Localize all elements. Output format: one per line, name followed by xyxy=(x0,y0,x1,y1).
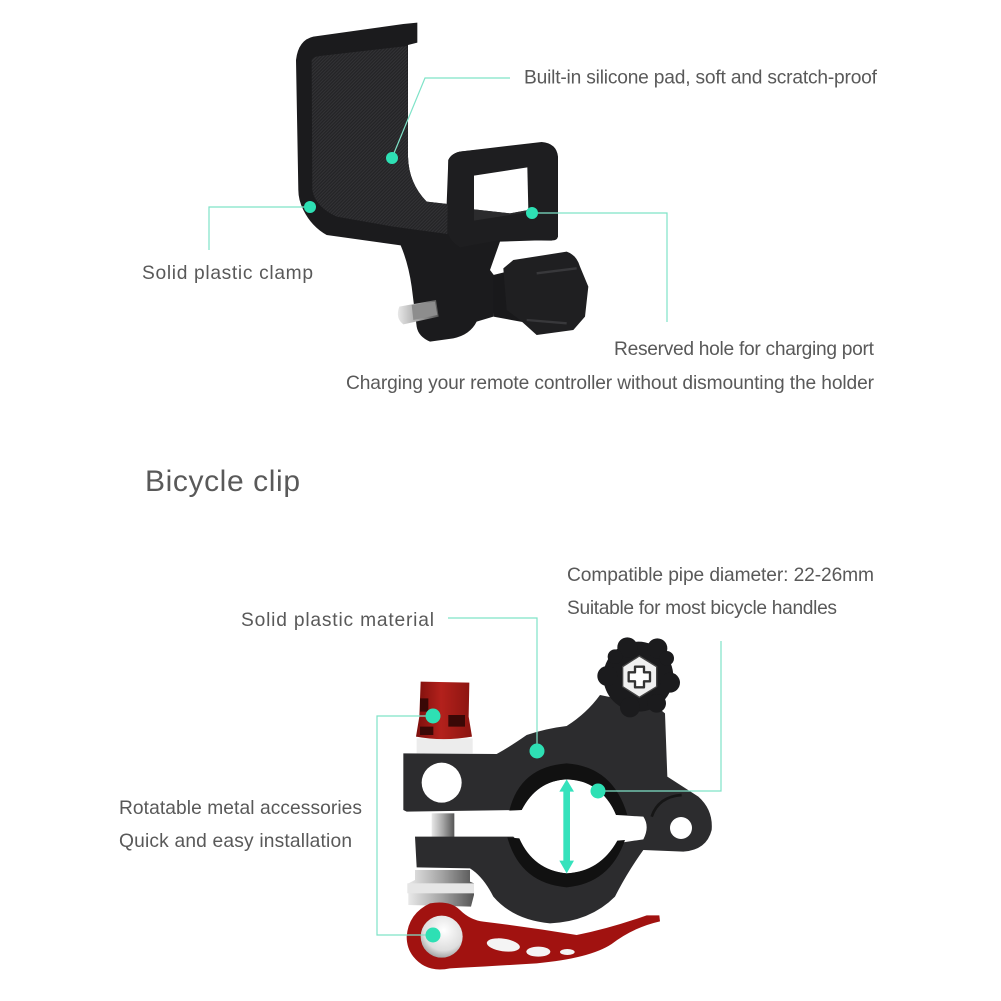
product photo: remote controller holder xyxy=(296,23,588,342)
metal washer xyxy=(408,870,474,907)
hinge hole xyxy=(670,817,692,839)
top knob xyxy=(597,637,680,717)
callout: rotatable metal accessories: Rotatable metal accessories xyxy=(119,798,362,819)
diameter arrow xyxy=(559,779,574,873)
callout: silicone pad xyxy=(386,68,878,164)
callout: solid plastic clamp: Solid plastic clamp xyxy=(142,263,313,284)
red lever xyxy=(407,902,660,969)
metal screw xyxy=(398,300,439,324)
clamp bolt hole xyxy=(422,763,462,803)
screw head xyxy=(623,656,657,697)
heading: bicycle clip: Bicycle clip xyxy=(145,465,300,498)
callout: solid plastic material: Solid plastic material xyxy=(241,610,434,631)
pad seen through hole xyxy=(474,209,528,221)
callout: reserved charging hole: Charging your remote controller without dismounting the holder xyxy=(346,373,875,394)
holder body xyxy=(296,23,558,342)
lever holes xyxy=(486,936,521,954)
knob xyxy=(503,252,588,335)
callout: silicone pad: Built-in silicone pad, soft and scratch-proof xyxy=(524,68,878,88)
callout: compatible pipe diameter xyxy=(567,565,874,798)
callout: compatible pipe diameter: Suitable for most bicycle handles xyxy=(567,598,837,619)
cross recess xyxy=(629,667,650,687)
inner rubber ring bottom xyxy=(507,837,625,887)
callout: solid plastic material xyxy=(241,610,544,758)
silicone pad xyxy=(312,46,448,234)
callout: solid plastic clamp xyxy=(142,201,316,284)
callout: compatible pipe diameter: Compatible pipe diameter: 22-26mm xyxy=(567,565,874,586)
metal pin xyxy=(432,813,454,838)
white spacer under red cap xyxy=(417,738,473,753)
product photo: bicycle clip xyxy=(403,637,712,969)
callout: reserved charging hole xyxy=(346,207,875,394)
knob stem xyxy=(493,267,530,323)
callout: rotatable metal accessories: Quick and easy installation xyxy=(119,831,352,852)
callout: rotatable metal accessories xyxy=(119,708,440,942)
hinge edge xyxy=(652,795,682,817)
charging port frame xyxy=(447,143,558,247)
red cap xyxy=(416,682,472,739)
callout: reserved charging hole: Reserved hole for charging port xyxy=(614,339,875,360)
red cap knurling xyxy=(420,698,465,735)
inner rubber ring top xyxy=(509,763,627,815)
lever ball xyxy=(421,916,463,958)
charging port hole xyxy=(474,167,528,213)
clamp body xyxy=(403,695,712,923)
